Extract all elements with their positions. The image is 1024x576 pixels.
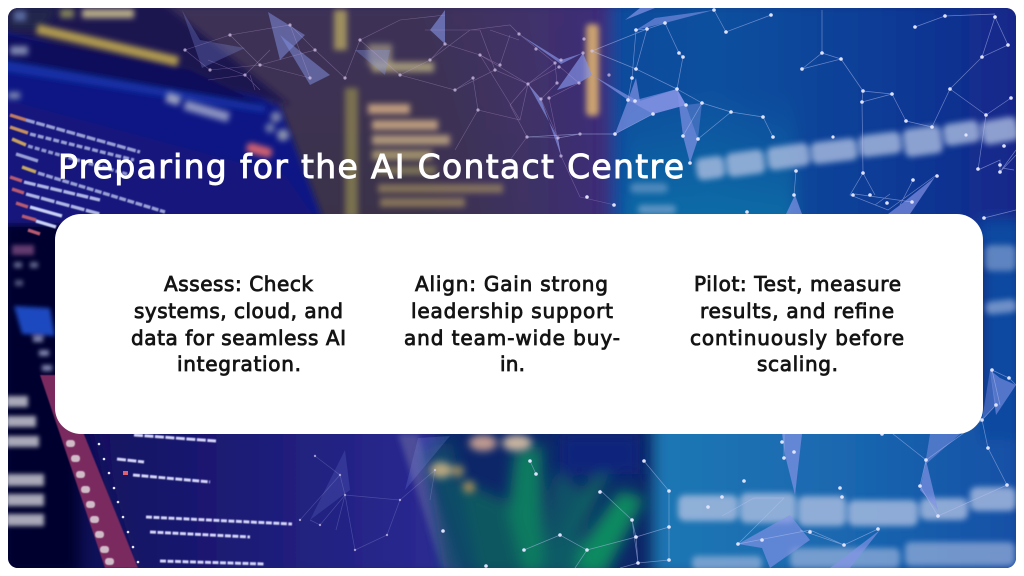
mesh fill triangles bbox=[182, 8, 1016, 568]
blurred code text on right screens bbox=[630, 116, 1020, 570]
right blue screen bottom bbox=[650, 410, 1024, 576]
text block: Pilot step: results, and refine bbox=[700, 299, 894, 323]
text block: Align step: leadership support bbox=[411, 299, 613, 323]
blurred header bars on left screen bbox=[8, 9, 289, 158]
text block: Pilot step: continuously before bbox=[690, 326, 904, 350]
text block: Pilot step: scaling. bbox=[757, 352, 838, 376]
text block: Assess step: Assess: Check bbox=[164, 272, 313, 296]
left screen bbox=[0, 0, 325, 225]
blurred grey bars bottom-left bbox=[6, 396, 44, 526]
text block: Pilot step bbox=[690, 272, 904, 376]
blurred orange lights in plant bbox=[430, 435, 532, 493]
mesh nodes bbox=[441, 8, 1013, 568]
title: Preparing for the AI Contact Centre bbox=[58, 147, 684, 186]
panel: white card with three steps bbox=[55, 214, 983, 434]
line marker dots bbox=[66, 440, 114, 565]
mesh lines bbox=[300, 10, 1016, 568]
dense purple mesh lines bbox=[185, 15, 615, 205]
left gutter bbox=[0, 210, 80, 576]
sharp code lines bottom bbox=[117, 435, 292, 564]
network mesh overlay bbox=[182, 8, 1016, 568]
blurred amber code on middle panel bbox=[334, 10, 599, 218]
sharp code lines top-left bbox=[10, 115, 165, 234]
plant base bbox=[432, 434, 660, 568]
middle dark panel bbox=[166, 8, 621, 214]
text block: Align step bbox=[404, 272, 620, 376]
left gutter: line numbers and highlight bbox=[12, 245, 55, 371]
text block: Assess step: integration. bbox=[177, 352, 301, 376]
text block: Pilot step: Pilot: Test, measure bbox=[694, 272, 901, 296]
right blue screen top bbox=[610, 0, 1024, 250]
text block: Assess step: systems, cloud, and bbox=[134, 299, 343, 323]
green plant bbox=[425, 434, 645, 575]
text block: Assess step bbox=[131, 272, 346, 376]
bottom code area base bbox=[99, 434, 448, 568]
text block: Align step: in. bbox=[500, 352, 525, 376]
text block: Align step: and team-wide buy- bbox=[404, 326, 620, 350]
text block: Align step: Align: Gain strong bbox=[415, 272, 608, 296]
text block: Assess step: data for seamless AI bbox=[131, 326, 346, 350]
